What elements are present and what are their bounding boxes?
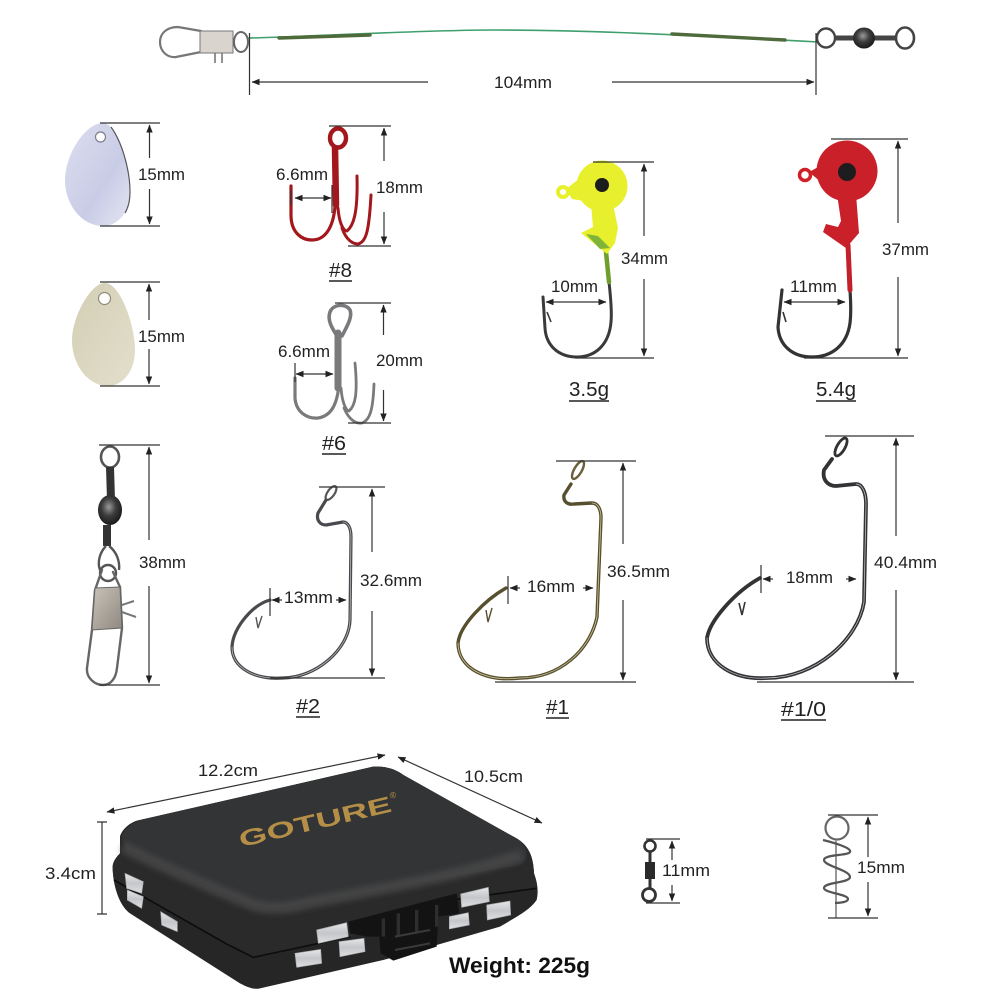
snap swivel 38mm: 38mm (139, 554, 186, 572)
tackle box (45, 755, 542, 989)
logo (236, 789, 401, 852)
jig head 5.4g: 37mm (882, 241, 929, 259)
icon: black tackle box with clips (113, 767, 538, 989)
worm hook #2 (232, 484, 422, 718)
icon: snap swivel (87, 446, 136, 685)
jig head 5.4g (778, 139, 929, 401)
label: 5.4g: 5.4g (816, 378, 856, 401)
spinner blade, silver (65, 123, 185, 226)
treble hook #8: 18mm (376, 179, 423, 197)
worm hook #1 (458, 459, 670, 719)
icon: red jig head (778, 140, 878, 357)
wire leader with dimension (160, 27, 914, 95)
treble hook #6: 6.6mm (278, 343, 330, 361)
spinner blade, gold: 15mm (138, 328, 185, 346)
jig head 5.4g: 11mm (790, 278, 837, 296)
jig head 3.5g: 10mm (551, 278, 598, 296)
icon: spring with ring (823, 816, 850, 918)
spinner blade, silver: 15mm (138, 166, 185, 184)
worm hook #1/0 (707, 436, 937, 721)
logo: ® (389, 789, 398, 801)
worm hook #2: 13mm (284, 589, 333, 607)
label: #6: #6 (322, 432, 346, 455)
label: #8: #8 (329, 259, 352, 282)
worm hook #1: 36.5mm (607, 563, 670, 581)
treble hook #8: 6.6mm (276, 166, 328, 184)
label: 104mm: 104mm (494, 74, 552, 92)
green wire (249, 30, 818, 42)
centering pin spring: 15mm (857, 859, 905, 877)
icon: rolling swivel (642, 840, 656, 902)
snap swivel 38mm (87, 445, 186, 685)
icon: barrel swivel on leader (817, 28, 914, 48)
label: #2: #2 (296, 695, 320, 718)
jig head 3.5g (543, 160, 668, 401)
centering pin spring (823, 815, 905, 918)
worm hook #1/0: 40.4mm (874, 554, 937, 572)
icon: silver treble hook (295, 305, 374, 423)
icon: bronze offset hook (458, 459, 601, 679)
mini rolling swivel: 11mm (662, 862, 710, 880)
icon: black offset hook (707, 436, 866, 678)
treble hook #6 (278, 303, 423, 455)
weight label: Weight: 225g (449, 953, 590, 978)
tackle box: 3.4cm (45, 865, 96, 883)
label: 3.5g: 3.5g (569, 378, 609, 401)
icon: red treble hook (291, 128, 371, 244)
label: #1: #1 (546, 696, 569, 719)
jig head 3.5g: 34mm (621, 250, 668, 268)
icon: yellow jig head (543, 160, 628, 357)
treble hook #8 (276, 126, 423, 282)
latch (348, 893, 459, 961)
worm hook #1: 16mm (527, 578, 575, 596)
tackle box: 12.2cm (198, 762, 258, 780)
icon: snap swivel on leader (160, 27, 248, 63)
logo: GOTURE (236, 791, 394, 852)
worm hook #2: 32.6mm (360, 572, 422, 590)
icon: silver offset hook (232, 484, 351, 678)
tackle box: 10.5cm (464, 768, 523, 786)
treble hook #6: 20mm (376, 352, 423, 370)
worm hook #1/0: 18mm (786, 569, 833, 587)
spinner blade, gold (72, 282, 185, 386)
mini rolling swivel (642, 839, 710, 903)
label: #1/0: #1/0 (781, 698, 826, 721)
